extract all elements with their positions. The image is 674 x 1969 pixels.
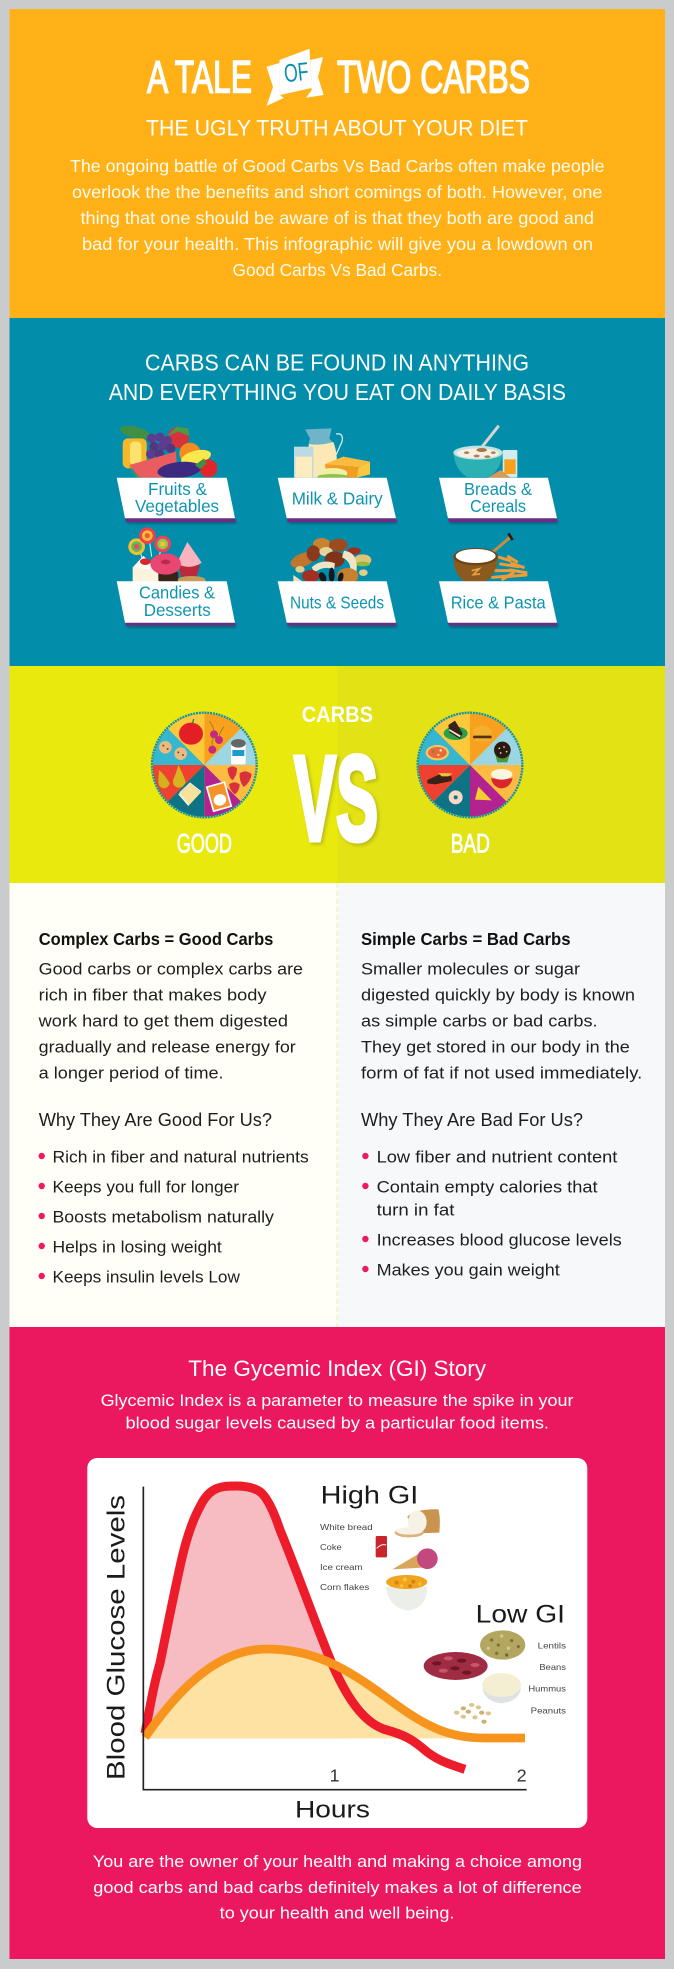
list: good reasons: Helps in losing weight bbox=[52, 1238, 222, 1256]
text: closing statement: You are the owner of your health and making a choice among bbox=[93, 1852, 582, 1871]
low GI food names: Peanuts bbox=[531, 1705, 567, 1715]
curve: high GI bbox=[145, 1486, 465, 1769]
axis label: hours: Hours bbox=[295, 1797, 370, 1824]
list: good reasons: Keeps insulin levels Low bbox=[52, 1268, 240, 1286]
list: bad reasons: Contain empty calories that bbox=[377, 1178, 598, 1196]
text: bad carbs description: Smaller molecules or sugar bbox=[361, 960, 581, 978]
text: good carbs description: a longer period of time. bbox=[39, 1064, 224, 1082]
icon: beans bbox=[424, 1652, 488, 1680]
icon: candies and desserts bbox=[128, 527, 206, 584]
list: good reasons bbox=[38, 1148, 309, 1286]
list: bad reasons: turn in fat bbox=[377, 1201, 455, 1219]
card: nuts and seeds bbox=[278, 581, 398, 628]
icon: breads and cereals bbox=[453, 427, 517, 478]
panel: bad carbs bbox=[337, 883, 665, 1327]
section heading: CARBS CAN BE FOUND IN ANYTHING bbox=[145, 349, 529, 375]
section heading: AND EVERYTHING YOU EAT ON DAILY BASIS bbox=[109, 379, 566, 405]
icon: corn flakes bbox=[386, 1575, 427, 1611]
bad label: BAD bbox=[451, 829, 490, 859]
text: bad carbs description: They get stored in our body in the bbox=[361, 1038, 630, 1056]
card: nuts and seeds: Nuts & Seeds bbox=[290, 593, 384, 613]
carbs label: CARBS bbox=[302, 702, 373, 727]
intro text: overlook the the benefits and short comings of both. However, one bbox=[72, 182, 602, 202]
text: good carbs description: work hard to get them digested bbox=[38, 1012, 288, 1030]
text: bad carbs description: form of fat if not used immediately. bbox=[361, 1064, 642, 1082]
text: closing statement: good carbs and bad carbs definitely makes a lot of difference bbox=[93, 1878, 582, 1897]
list: good reasons: Keeps you full for longer bbox=[52, 1178, 240, 1196]
panel: glycemic index bbox=[10, 1327, 665, 1959]
icon: good carbs wheel bbox=[152, 713, 257, 817]
heading: complex carbs: Complex Carbs = Good Carbs bbox=[39, 929, 274, 949]
text: good carbs description: gradually and release energy for bbox=[39, 1038, 296, 1056]
icon: nuts and seeds bbox=[288, 538, 371, 584]
icon: rice and pasta bbox=[453, 533, 526, 582]
card: rice and pasta bbox=[439, 581, 559, 628]
card: milk and dairy bbox=[278, 478, 398, 524]
chart card bbox=[87, 1458, 587, 1828]
tick label: two: 2 bbox=[517, 1766, 527, 1786]
card: fruits and vegetables: Fruits & bbox=[148, 479, 207, 499]
text: closing statement bbox=[93, 1852, 582, 1923]
subtitle: THE UGLY TRUTH ABOUT YOUR DIET bbox=[146, 116, 528, 140]
text: good carbs description: Good carbs or complex carbs are bbox=[39, 960, 303, 978]
subheading: why good: Why They Are Good For Us? bbox=[39, 1109, 272, 1130]
low GI food names: Beans bbox=[539, 1662, 567, 1672]
list: bad reasons: Makes you gain weight bbox=[377, 1261, 560, 1279]
low GI food names: Hummus bbox=[528, 1684, 567, 1694]
low GI label: Low GI bbox=[476, 1601, 565, 1628]
intro text: Good Carbs Vs Bad Carbs. bbox=[232, 260, 442, 280]
chart: glucose curves bbox=[102, 1482, 567, 1824]
list: bad reasons bbox=[362, 1148, 622, 1279]
list: bad reasons: Increases blood glucose levels bbox=[377, 1231, 622, 1249]
card: fruits and vegetables: Vegetables bbox=[135, 496, 219, 516]
list: good reasons: Rich in fiber and natural nutrients bbox=[52, 1148, 309, 1166]
high GI food names: White bread bbox=[320, 1522, 373, 1532]
intro text: The ongoing battle of Good Carbs Vs Bad Carbs often make people bbox=[70, 156, 604, 176]
list: good reasons: Boosts metabolism naturally bbox=[52, 1208, 275, 1226]
card: fruits and vegetables bbox=[117, 478, 237, 524]
icon: hummus bbox=[482, 1673, 521, 1703]
versus label: VS bbox=[294, 730, 378, 866]
high GI food names: Ice cream bbox=[320, 1562, 363, 1572]
title bbox=[147, 49, 530, 106]
panel: good carbs bbox=[10, 883, 338, 1327]
curve: low GI bbox=[145, 1649, 525, 1738]
intro text: thing that one should be aware of is that they both are good and bbox=[80, 208, 594, 228]
high GI label: High GI bbox=[321, 1482, 418, 1509]
low GI food names bbox=[528, 1641, 567, 1715]
card: candies and desserts: Desserts bbox=[144, 600, 211, 620]
icon: of ribbon: OF bbox=[283, 58, 310, 88]
card: milk and dairy: Milk & Dairy bbox=[292, 489, 383, 509]
text: good carbs description: rich in fiber that makes body bbox=[39, 986, 267, 1004]
section heading bbox=[109, 349, 566, 405]
card: candies and desserts bbox=[117, 581, 237, 628]
axis label: blood glucose levels: Blood Glucose Levels bbox=[102, 1495, 130, 1780]
icon: peanuts bbox=[454, 1703, 491, 1724]
icon: of ribbon bbox=[266, 49, 324, 106]
text: glycemic definition: Glycemic Index is a parameter to measure the spike in your bbox=[101, 1391, 574, 1410]
card: breads and cereals: Cereals bbox=[470, 496, 526, 516]
subheading: why bad: Why They Are Bad For Us? bbox=[361, 1109, 583, 1130]
icon: coke can bbox=[376, 1536, 387, 1557]
panel: carb sources bbox=[10, 318, 665, 666]
axes bbox=[143, 1487, 527, 1790]
card: rice and pasta: Rice & Pasta bbox=[451, 593, 546, 613]
list: bad reasons: Low fiber and nutrient content bbox=[377, 1148, 618, 1166]
icon: ice cream bbox=[392, 1548, 438, 1569]
icon: bad carbs wheel bbox=[418, 713, 522, 817]
text: good carbs description bbox=[38, 960, 303, 1082]
intro text bbox=[70, 156, 604, 280]
icon: milk and dairy bbox=[294, 428, 370, 479]
icon: fruits and vegetables bbox=[119, 423, 217, 480]
title: A TALE bbox=[147, 52, 252, 102]
text: bad carbs description: digested quickly by body is known bbox=[361, 986, 635, 1004]
icon: bread bbox=[395, 1509, 440, 1537]
low GI food names: Lentils bbox=[538, 1641, 567, 1651]
tick label: one: 1 bbox=[330, 1766, 340, 1786]
text: bad carbs description: as simple carbs or bad carbs. bbox=[361, 1012, 598, 1030]
icon: lentils bbox=[480, 1630, 525, 1660]
intro text: bad for your health. This infographic will give you a lowdown on bbox=[82, 234, 593, 254]
text: glycemic definition bbox=[101, 1391, 574, 1433]
heading: glycemic story: The Gycemic Index (GI) Story bbox=[188, 1356, 487, 1381]
panel: carbs versus bbox=[10, 666, 665, 883]
card: breads and cereals bbox=[439, 478, 559, 524]
title: TWO CARBS bbox=[337, 52, 530, 102]
high GI food names: Coke bbox=[320, 1542, 342, 1552]
high GI food names: Corn flakes bbox=[320, 1582, 370, 1592]
text: glycemic definition: blood sugar levels caused by a particular food items. bbox=[126, 1414, 549, 1433]
high GI food names bbox=[320, 1522, 373, 1592]
card: candies and desserts: Candies & bbox=[139, 583, 215, 603]
good label: GOOD bbox=[177, 829, 232, 859]
panel: header bbox=[10, 9, 665, 318]
heading: simple carbs: Simple Carbs = Bad Carbs bbox=[361, 929, 571, 949]
text: bad carbs description bbox=[361, 960, 642, 1082]
card: breads and cereals: Breads & bbox=[464, 479, 532, 499]
text: closing statement: to your health and well being. bbox=[220, 1904, 454, 1923]
